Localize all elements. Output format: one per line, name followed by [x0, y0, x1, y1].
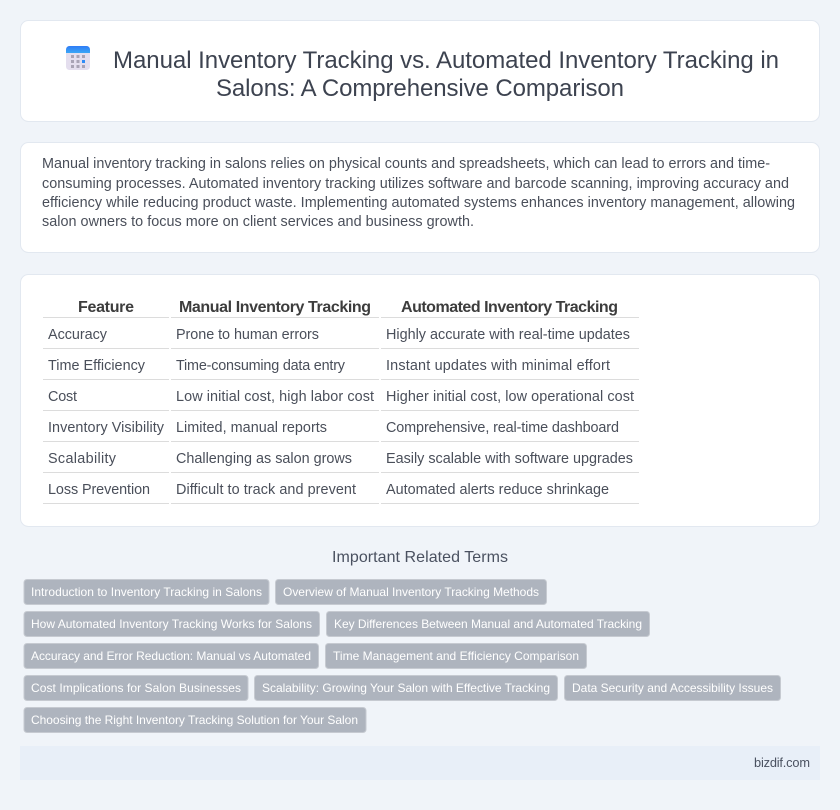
- table row: cost: Cost: [48, 389, 77, 405]
- table header: Feature: [78, 299, 134, 316]
- table header: Manual Inventory Tracking: [179, 299, 371, 316]
- text block: summary paragraph: salon owners to focus more on client services and business growth.: [42, 214, 474, 230]
- table row: loss prevention: Difficult to track and prevent: [176, 482, 356, 498]
- heading: Salons: A Comprehensive Comparison: [216, 75, 624, 102]
- table row: loss prevention: Automated alerts reduce shrinkage: [386, 482, 609, 498]
- table row: cost: Low initial cost, high labor cost: [176, 389, 374, 405]
- text block: summary paragraph: [42, 156, 795, 230]
- tag: How Automated Inventory Tracking Works for Salons: [31, 617, 312, 631]
- table row: time efficiency: [43, 358, 639, 380]
- table row: inventory visibility: Inventory Visibility: [48, 420, 165, 436]
- panel: comparison table: [20, 274, 820, 526]
- text block: summary paragraph: Manual inventory tracking in salons relies on physical counts and spreadsheets, which can lead to errors and time-: [42, 156, 770, 172]
- tag: [326, 612, 650, 636]
- tag: [276, 580, 546, 604]
- tag: [24, 644, 318, 668]
- table row: scalability: Scalability: [48, 451, 117, 467]
- panel: title: [20, 20, 820, 122]
- tag: Scalability: Growing Your Salon with Effective Tracking: [262, 681, 550, 695]
- tag: [24, 708, 366, 732]
- table row: scalability: Easily scalable with software upgrades: [386, 451, 633, 467]
- table row: cost: [43, 389, 639, 410]
- tag: [24, 612, 320, 636]
- panel: summary: [20, 142, 820, 252]
- footer: bizdif.com: [754, 755, 810, 770]
- table header: [43, 299, 639, 318]
- heading: related terms: Important Related Terms: [332, 549, 508, 566]
- table row: loss prevention: [43, 482, 639, 504]
- table row: scalability: Challenging as salon grows: [176, 451, 352, 467]
- tag: Time Management and Efficiency Comparison: [333, 649, 579, 663]
- table row: inventory visibility: Comprehensive, real-time dashboard: [386, 420, 619, 436]
- table row: accuracy: Accuracy: [48, 327, 108, 343]
- footer: [20, 746, 820, 780]
- table row: inventory visibility: Limited, manual reports: [176, 420, 327, 436]
- tag: [254, 676, 558, 700]
- text block: summary paragraph: efficiency while reducing product waste. Implementing automated systems enhances inventory management, allowing: [42, 195, 795, 211]
- tag: Accuracy and Error Reduction: Manual vs Automated: [31, 649, 311, 663]
- table row: accuracy: Prone to human errors: [176, 327, 319, 343]
- table row: accuracy: Highly accurate with real-time updates: [386, 327, 630, 343]
- table row: cost: Higher initial cost, low operational cost: [386, 389, 634, 405]
- tag: [24, 676, 248, 700]
- heading: Manual Inventory Tracking vs. Automated Inventory Tracking in: [113, 47, 779, 74]
- heading: [113, 47, 779, 102]
- tag: Data Security and Accessibility Issues: [572, 681, 773, 695]
- text block: summary paragraph: consuming processes. Automated inventory tracking utilizes software and barcode scanning, improving accuracy and: [42, 176, 789, 192]
- tag: Choosing the Right Inventory Tracking Solution for Your Salon: [31, 713, 358, 727]
- tag: [564, 676, 780, 700]
- table row: time efficiency: Instant updates with minimal effort: [386, 358, 610, 374]
- tag: Key Differences Between Manual and Automated Tracking: [334, 617, 642, 631]
- table row: loss prevention: Loss Prevention: [48, 482, 150, 498]
- icon: calendar: [66, 46, 90, 70]
- tag list: related terms: [24, 580, 780, 732]
- table row: time efficiency: Time Efficiency: [48, 358, 146, 374]
- table row: time efficiency: Time-consuming data entry: [176, 358, 346, 374]
- tag: [326, 644, 586, 668]
- tag: [24, 580, 269, 604]
- tag: Overview of Manual Inventory Tracking Methods: [283, 585, 539, 599]
- table row: inventory visibility: [43, 420, 639, 442]
- table row: accuracy: [43, 327, 639, 348]
- tag: Cost Implications for Salon Businesses: [31, 681, 241, 695]
- tag: Introduction to Inventory Tracking in Salons: [31, 585, 262, 599]
- table header: Automated Inventory Tracking: [401, 299, 618, 316]
- table row: scalability: [43, 451, 639, 472]
